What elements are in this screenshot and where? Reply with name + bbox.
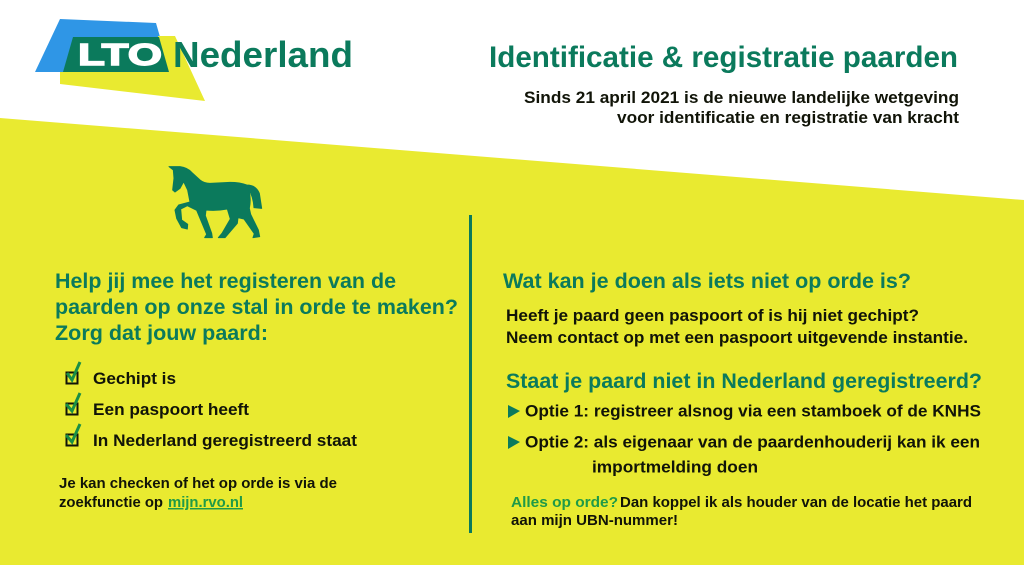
check item: Gechipt is: Gechipt is [93,369,176,388]
check note [59,476,337,511]
left heading: Help jij mee het registeren van de [55,269,396,293]
yellow diagonal background [0,118,1024,565]
second heading: Staat je paard niet in Nederland geregistreerd? [506,369,982,393]
check item: Een paspoort heeft [66,393,249,419]
closing note: Dan koppel ik als houder van de locatie het paard [620,495,972,511]
icon: horse [169,167,262,238]
closing note: Alles op orde? [511,495,618,511]
right heading: Wat kan je doen als iets niet op orde is? [503,269,911,293]
option 2: importmelding doen [592,458,758,476]
passport text: Heeft je paard geen paspoort of is hij niet gechipt? [506,306,919,325]
intro text: voor identificatie en registratie van kracht [617,108,959,127]
check note: mijn.rvo.nl [168,495,243,511]
logo: LTO Nederland [35,19,353,101]
left heading: paarden op onze stal in orde te maken? [55,295,458,319]
intro text: Sinds 21 april 2021 is de nieuwe landelijke wetgeving [524,88,959,107]
option 2: Optie 2: als eigenaar van de paardenhouderij kan ik een [525,432,980,452]
centre divider [469,215,472,533]
check item: In Nederland geregistreerd staat [66,424,357,450]
check note: zoekfunctie op [59,495,163,511]
closing note: aan mijn UBN-nummer! [511,513,678,529]
passport text: Neem contact op met een paspoort uitgevende instantie. [506,328,968,347]
check item: Een paspoort heeft: Een paspoort heeft [93,400,249,419]
check item: In Nederland geregistreerd staat: In Nederland geregistreerd staat [93,431,357,450]
title: Identificatie & registratie paarden [489,41,958,74]
check item: Gechipt is [66,362,176,388]
logo: LTO Nederland: Nederland [173,34,353,75]
closing note [511,495,972,529]
option 1: Optie 1: registreer alsnog via een stamboek of de KNHS [525,402,981,420]
checklist [66,362,357,450]
left heading: Zorg dat jouw paard: [55,321,268,345]
option 2 [508,432,980,476]
left heading [55,269,458,345]
logo: LTO Nederland: LTO [78,38,162,72]
check note: Je kan checken of het op orde is via de [59,476,337,492]
intro text [524,88,959,127]
passport text [506,306,968,347]
